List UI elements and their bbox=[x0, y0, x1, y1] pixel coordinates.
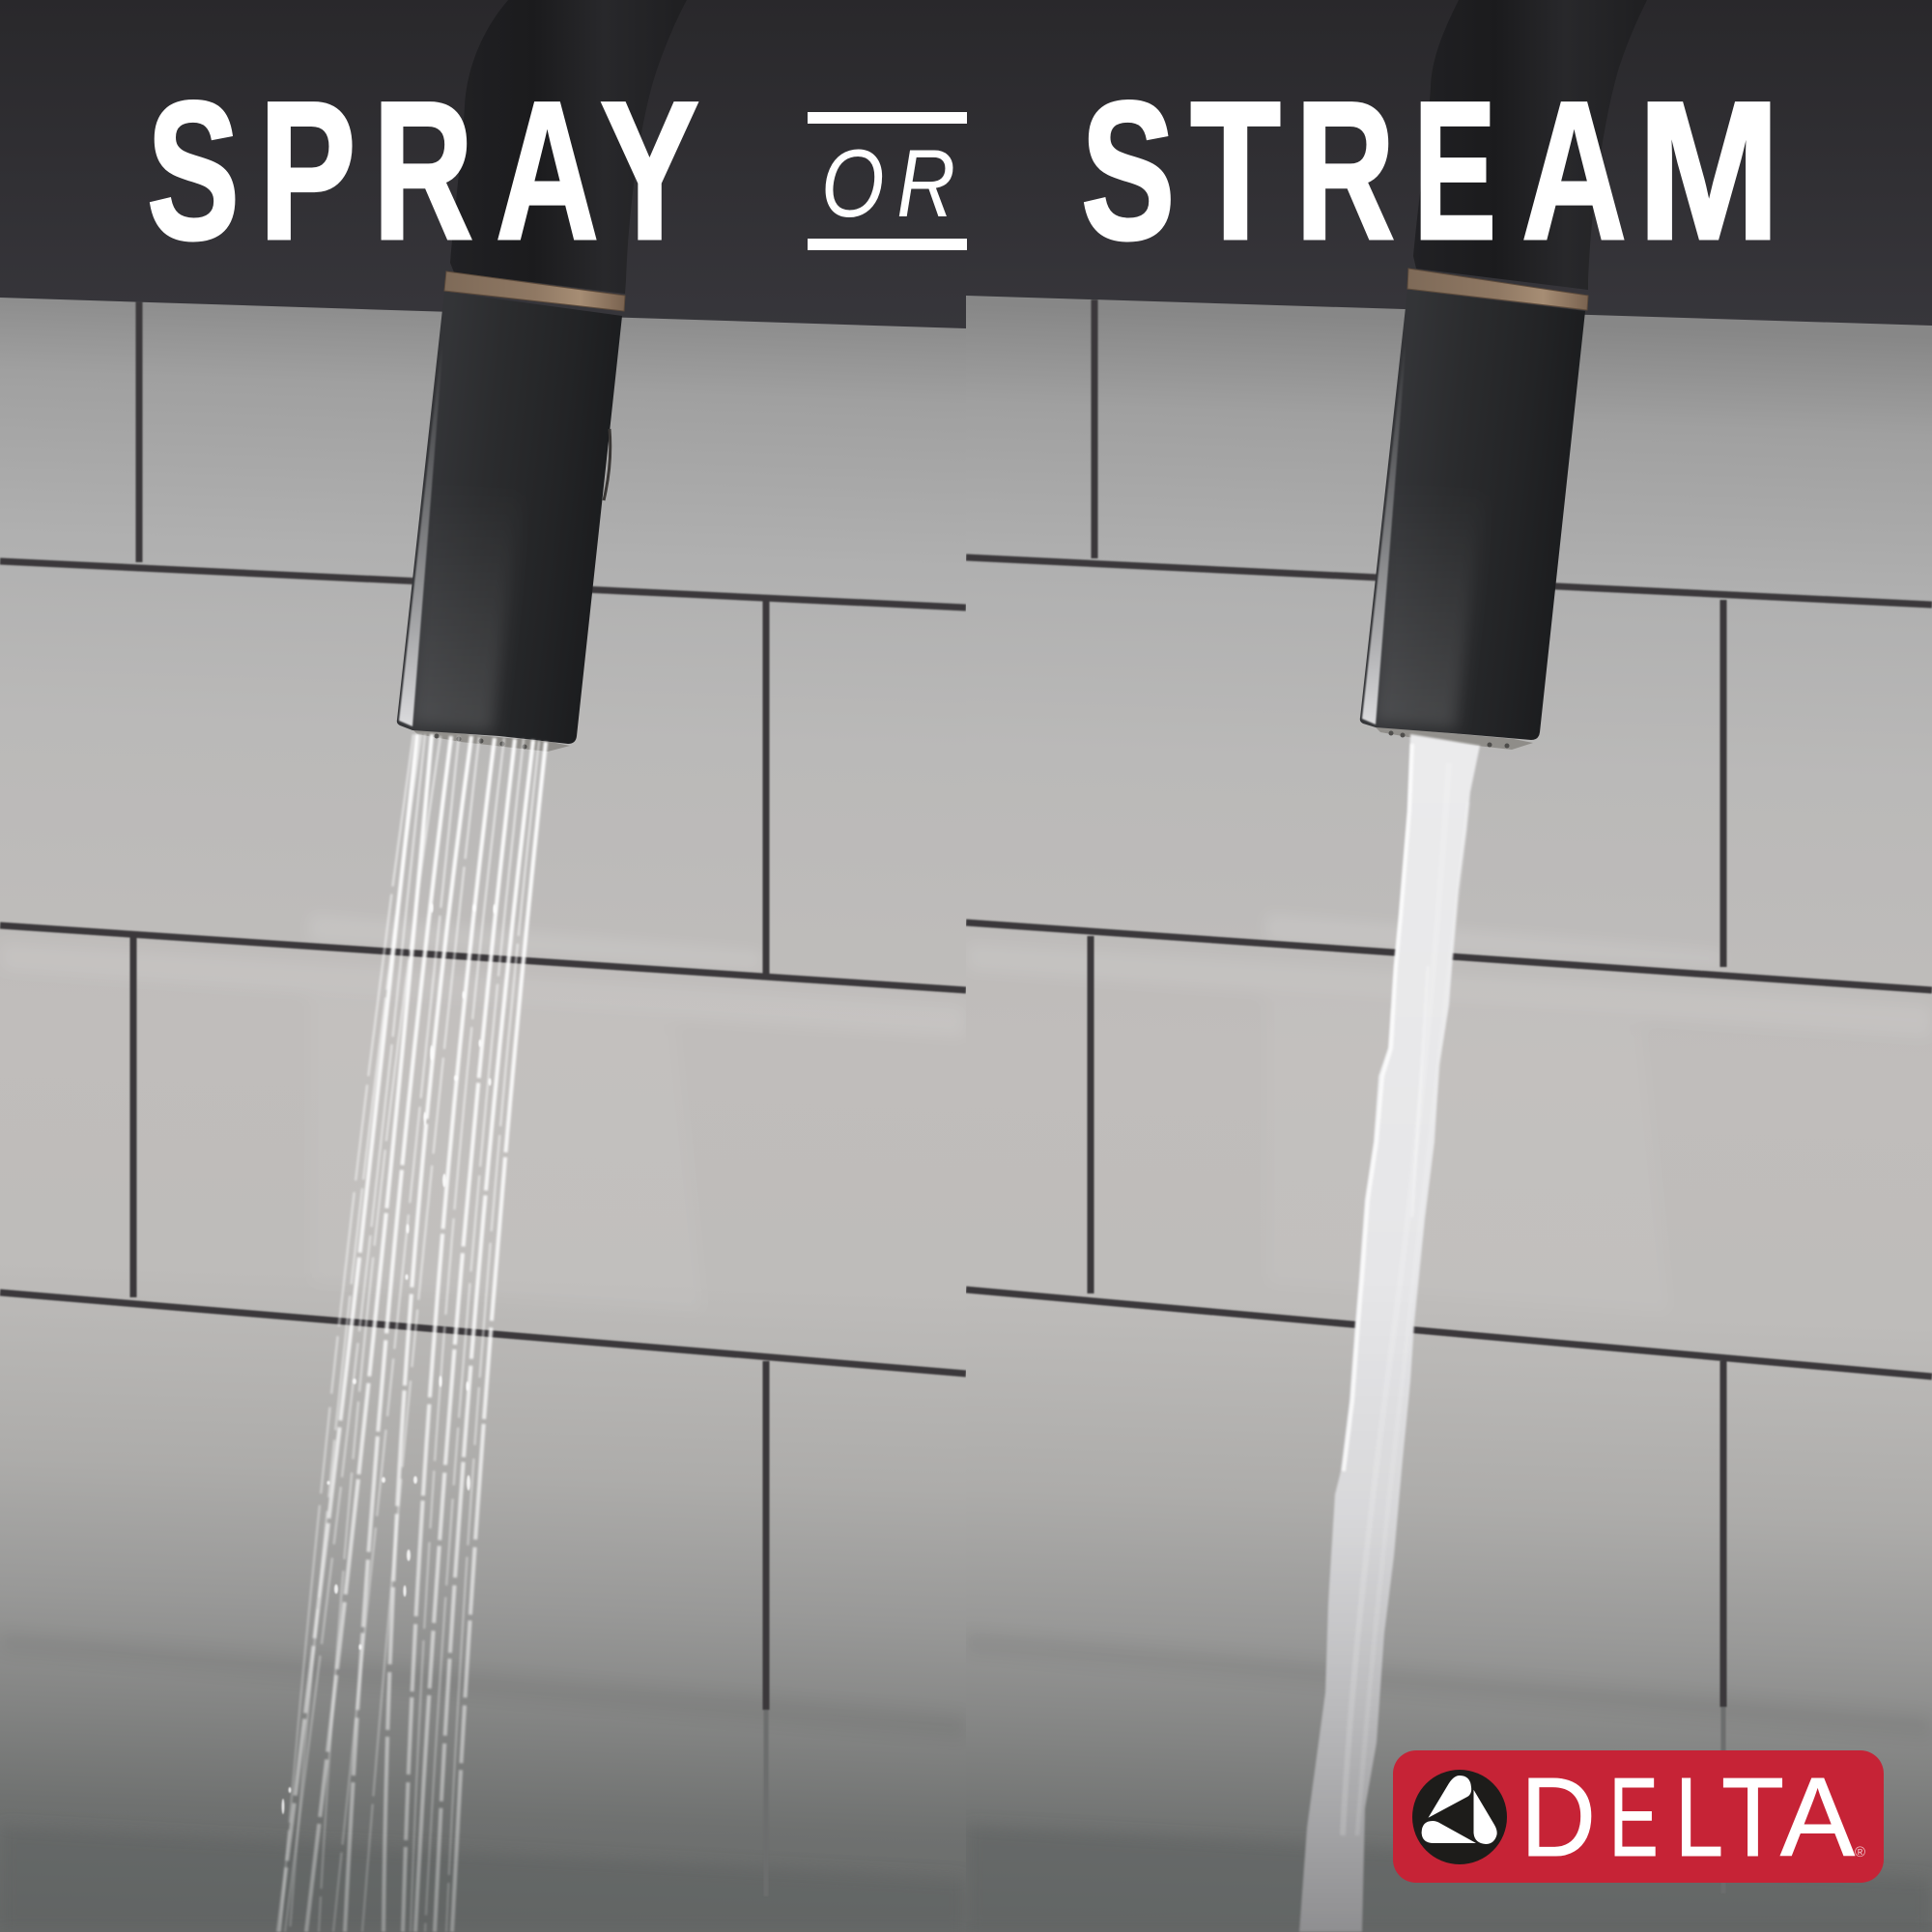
spray water bbox=[278, 734, 546, 1932]
title: STREAM: S bbox=[1081, 61, 1175, 281]
grout lines bbox=[0, 301, 966, 1896]
title: SPRAY: Y bbox=[600, 61, 699, 281]
title: STREAM: E bbox=[1413, 61, 1496, 281]
bronze ring bbox=[1407, 269, 1588, 310]
faucet neck bbox=[450, 0, 687, 294]
Delta logo badge bbox=[1393, 1750, 1884, 1883]
DELTA wordmark: A bbox=[1780, 1754, 1856, 1880]
body lighter lower side bbox=[413, 556, 506, 735]
body lighter lower side bbox=[1374, 483, 1485, 729]
title: SPRAY: A bbox=[496, 61, 599, 281]
tiled wall background bbox=[0, 309, 966, 1932]
nozzle face bbox=[412, 729, 570, 752]
tiled wall background bbox=[966, 0, 1932, 1929]
DELTA wordmark: E bbox=[1609, 1754, 1659, 1880]
bronze ring bbox=[444, 271, 625, 311]
body highlight bbox=[399, 343, 443, 726]
DELTA wordmark: D bbox=[1520, 1754, 1596, 1880]
tile reflections bbox=[0, 913, 966, 1314]
title: STREAM: T bbox=[1190, 61, 1281, 281]
OR divider: OR bbox=[821, 131, 955, 238]
DELTA wordmark: L bbox=[1675, 1754, 1723, 1880]
title: SPRAY: R bbox=[373, 61, 473, 281]
faucet neck bbox=[1413, 0, 1647, 290]
title: STREAM: R bbox=[1295, 61, 1395, 281]
grout lines bbox=[966, 299, 1932, 1893]
icon: Delta emblem bbox=[1412, 1770, 1507, 1864]
counter and sink shadow bbox=[966, 1633, 1932, 1932]
stream highlights bbox=[1343, 744, 1468, 1835]
faucet body bbox=[397, 292, 622, 744]
tile reflections bbox=[966, 913, 1932, 1314]
water droplets bbox=[282, 903, 497, 1814]
counter and sink shadow bbox=[8, 1834, 958, 1896]
dark upper band bbox=[0, 0, 966, 328]
title: STREAM: M bbox=[1637, 61, 1780, 281]
OR divider bbox=[808, 112, 967, 250]
trigger button bbox=[604, 429, 611, 500]
water stream bbox=[1299, 734, 1480, 1932]
dark upper band bbox=[966, 0, 1932, 326]
body highlight bbox=[1362, 340, 1406, 724]
DELTA wordmark: T bbox=[1721, 1754, 1784, 1880]
registered mark: ® bbox=[1855, 1844, 1865, 1861]
title: STREAM: A bbox=[1521, 61, 1627, 281]
title: SPRAY: P bbox=[259, 61, 356, 281]
panel: spray photo bbox=[0, 0, 966, 1932]
faucet body bbox=[1360, 290, 1585, 740]
nozzle face bbox=[1375, 726, 1533, 750]
panel: stream photo bbox=[966, 0, 1932, 1932]
title: SPRAY: S bbox=[147, 61, 240, 281]
